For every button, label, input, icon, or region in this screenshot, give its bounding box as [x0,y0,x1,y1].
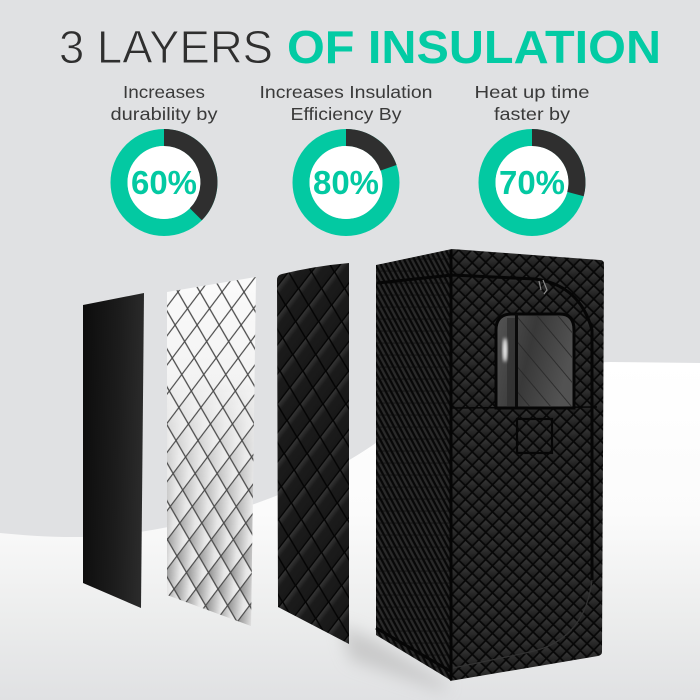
vent patch [517,419,552,453]
stat label second line: faster by [494,104,570,124]
window left dark band [507,318,515,406]
white wave background shape [0,362,700,700]
tent side face [376,249,452,681]
door lower curve [453,580,592,668]
window [496,314,574,408]
stat: durability [110,82,218,228]
title [59,21,661,73]
top zipper and door outline [377,275,592,580]
title: first part: 3 LAYERS [59,21,273,73]
donut ring dark segment [164,138,209,214]
window glass [496,314,574,408]
donut ring dark segment [532,138,577,194]
tent front face [450,249,604,681]
stat label: Increases Insulation [260,82,432,102]
layer 1: plain black sheet [83,293,144,608]
window highlight [503,338,507,362]
window divider [515,314,518,408]
donut ring teal [119,138,209,228]
donut ring dark segment [346,138,388,168]
donut ring teal [487,138,577,228]
donut ring teal [301,138,391,228]
donut value: 80% [313,164,379,201]
mid seam [452,407,597,408]
zipper pull [539,280,547,294]
donut value: 60% [131,164,197,201]
sauna tent [376,249,604,681]
layer 2: reflective quilted sheet [167,277,256,626]
stat label second line: Efficiency By [290,104,402,124]
stat: insulation efficiency [260,82,432,228]
stat label second line: durability by [110,104,218,124]
stat label: Heat up time [474,82,590,102]
stat: heat up time [474,82,590,228]
window reflected seams [518,316,572,406]
donut centre [496,146,568,219]
donut value: 70% [499,164,565,201]
donut centre [310,146,382,219]
donut centre [128,146,200,219]
lower side seam [376,628,450,671]
layer 3: black quilted sheet [277,263,349,644]
tent floor shadow [340,625,450,690]
stat label: Increases [123,82,205,102]
tent corner seam [450,250,452,680]
title: highlighted part: OF INSULATION [287,21,661,73]
